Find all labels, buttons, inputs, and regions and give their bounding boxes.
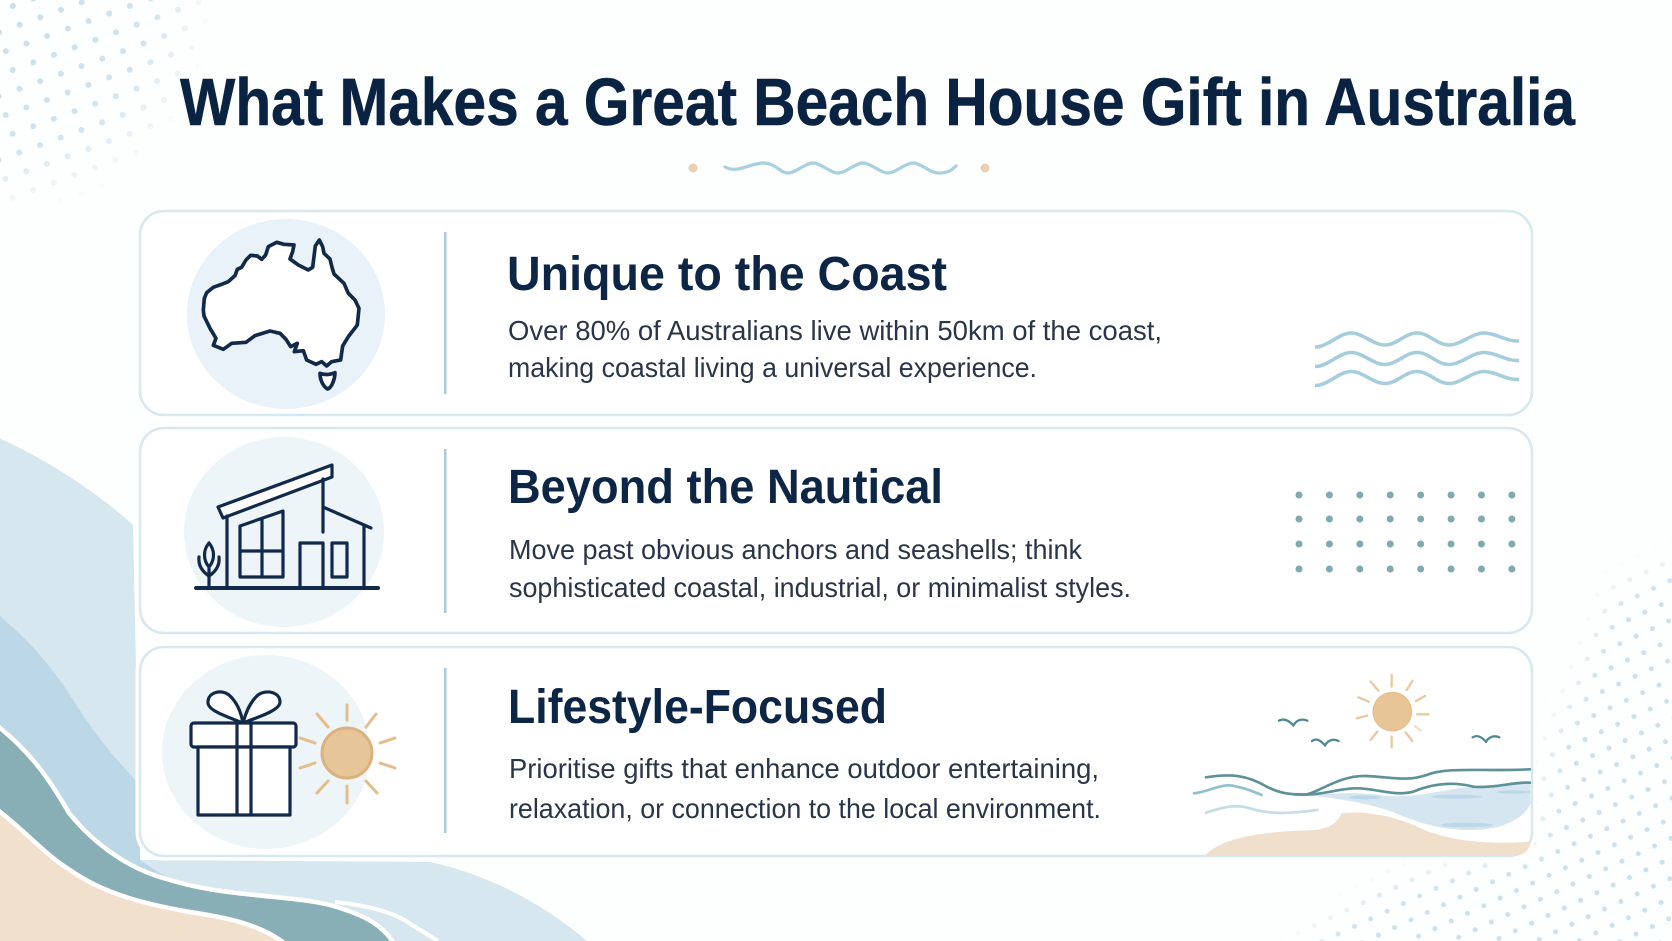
title ornament: wave and dots <box>688 163 990 173</box>
bottom-left coastal waves <box>0 434 587 941</box>
bottom-right dot pattern <box>1298 562 1672 941</box>
divider <box>444 668 446 833</box>
body text: Prioritise gifts that enhance outdoor entertaining, <box>509 753 1099 784</box>
panel: Beyond the Nautical <box>140 428 1532 633</box>
body text <box>509 753 1101 824</box>
body text: Over 80% of Australians live within 50km of the coast, <box>508 315 1162 346</box>
heading: Unique to the Coast <box>507 248 947 301</box>
top-left dot pattern <box>0 0 202 200</box>
divider <box>444 449 446 613</box>
body text <box>508 315 1162 383</box>
icon: gift and sun <box>162 655 395 849</box>
divider <box>444 232 446 394</box>
illustration: beach scene <box>1194 675 1531 856</box>
body text: sophisticated coastal, industrial, or minimalist styles. <box>509 572 1131 603</box>
icon: Australia map <box>187 219 385 409</box>
heading: Lifestyle-Focused <box>508 681 887 734</box>
heading: Beyond the Nautical <box>508 461 943 514</box>
body text: making coastal living a universal experience. <box>508 352 1037 383</box>
panel: Lifestyle-Focused <box>140 647 1532 856</box>
body text: relaxation, or connection to the local environment. <box>509 793 1101 824</box>
decoration: dot grid <box>1299 495 1515 569</box>
panel: Unique to the Coast <box>140 211 1532 415</box>
icon: beach house <box>184 437 384 627</box>
body text: Move past obvious anchors and seashells; think <box>509 534 1083 565</box>
body text <box>509 534 1131 603</box>
decoration: three waves <box>1315 333 1519 386</box>
